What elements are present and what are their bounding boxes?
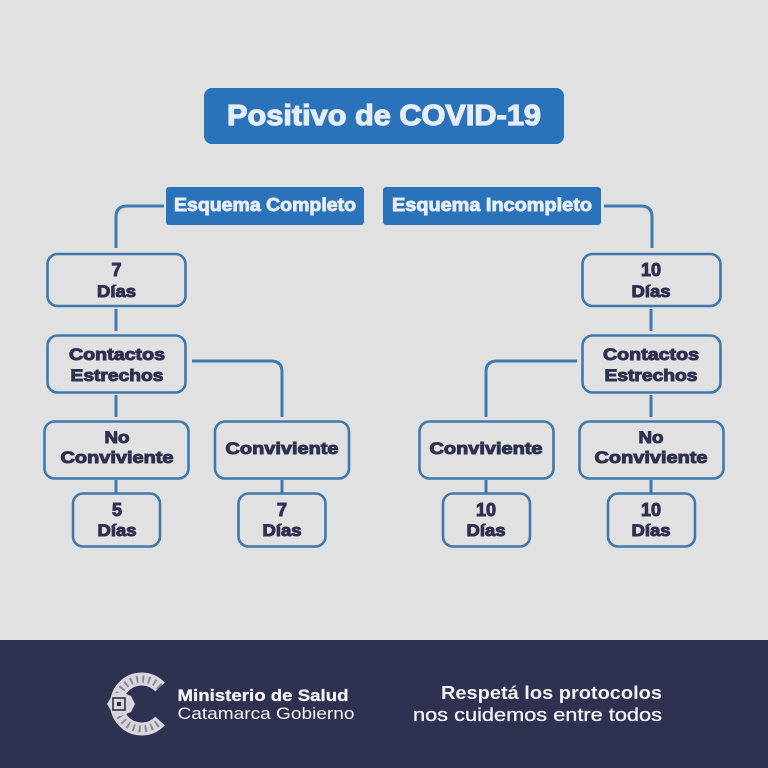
title: [204, 88, 564, 144]
box: 10 días conviviente: 10: [476, 500, 496, 520]
icon: Catamarca logo: [107, 679, 160, 729]
heading: esquema completo: Esquema Completo: [174, 195, 356, 215]
box: 5 días: Días: [98, 521, 136, 540]
box: conviviente: [420, 422, 554, 478]
box: 10 días no conviviente: [608, 494, 695, 546]
box: 7 días: 7: [111, 260, 122, 280]
panel: esquema completo branch: [44, 187, 364, 546]
text: slogan: nos cuidemos entre todos: [413, 705, 662, 725]
box: conviviente: Conviviente: [430, 439, 542, 458]
connectors: [116, 206, 282, 493]
text: ministerio de salud: Catamarca Gobierno: [178, 704, 354, 723]
box: 10 días: Días: [632, 282, 670, 301]
heading: esquema incompleto: Esquema Incompleto: [392, 195, 592, 215]
box: 5 días: 5: [112, 500, 122, 520]
box: no conviviente: [580, 422, 724, 478]
box: contactos estrechos: Contactos: [69, 345, 165, 364]
box: contactos estrechos: Estrechos: [604, 366, 698, 385]
panel: esquema incompleto branch: [383, 187, 724, 546]
box: 10 días no conviviente: Días: [632, 521, 670, 540]
title: Positivo de COVID-19: [227, 100, 541, 132]
text: ministerio de salud: Ministerio de Salud: [178, 686, 348, 705]
box: contactos estrechos: [48, 336, 186, 392]
text: slogan: Respetá los protocolos: [441, 683, 662, 703]
box: conviviente: Conviviente: [226, 439, 338, 458]
box: no conviviente: No: [638, 428, 664, 447]
box: no conviviente: Conviviente: [594, 448, 708, 467]
heading: esquema incompleto: [383, 187, 601, 225]
box: no conviviente: No: [104, 428, 130, 447]
connectors: [486, 206, 652, 493]
text: slogan: [413, 683, 662, 725]
footer band: [0, 640, 768, 768]
box: 7 días conviviente: 7: [277, 500, 287, 520]
box: 7 días conviviente: Días: [262, 521, 302, 540]
box: 10 días: [582, 254, 720, 306]
box: 10 días: 10: [641, 260, 661, 280]
box: contactos estrechos: Estrechos: [70, 366, 164, 385]
box: 5 días: [73, 494, 160, 546]
heading: esquema completo: [166, 187, 364, 225]
box: contactos estrechos: Contactos: [603, 345, 699, 364]
box: 10 días conviviente: Días: [466, 521, 506, 540]
box: 10 días no conviviente: 10: [641, 500, 661, 520]
text: ministerio de salud: [178, 686, 354, 723]
box: 10 días conviviente: [443, 494, 530, 546]
box: contactos estrechos: [582, 336, 720, 392]
box: 7 días: Días: [97, 282, 136, 301]
box: no conviviente: [44, 422, 188, 478]
box: 7 días conviviente: [238, 494, 326, 546]
box: 7 días: [48, 254, 186, 306]
box: conviviente: [215, 422, 349, 478]
box: no conviviente: Conviviente: [60, 448, 174, 467]
